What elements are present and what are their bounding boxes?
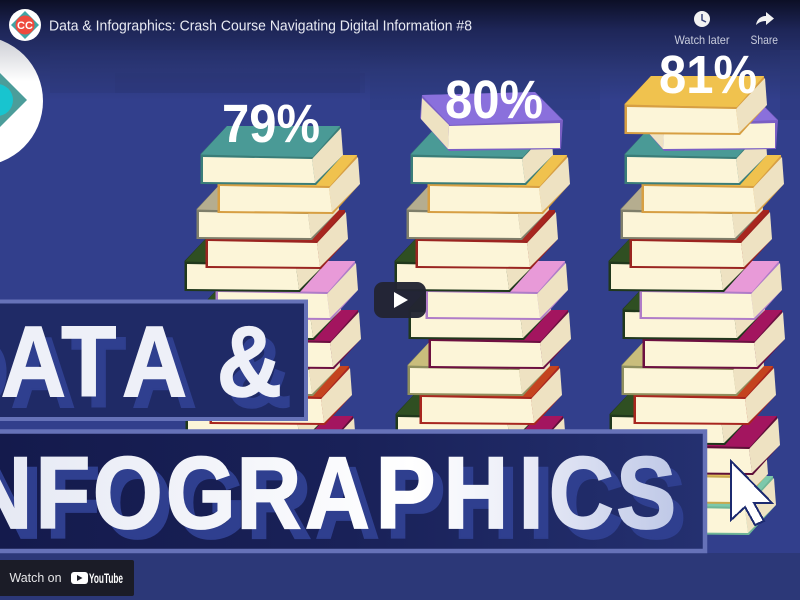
book: yellow top book: [624, 76, 767, 135]
share label: Share: [750, 33, 778, 47]
video title: Data & Infographics: Crash Course Navigating Digital Information #8: [49, 18, 472, 34]
percentage label: 80%: 80%: [445, 70, 543, 130]
watch later label: Watch later: [674, 33, 730, 47]
book stack column: 79%: [184, 94, 361, 535]
share control: [750, 12, 778, 47]
book stack column: 81%: [608, 45, 785, 535]
percentage label: 79%: 79%: [222, 94, 320, 154]
watch on youtube badge: [0, 560, 134, 596]
watch on youtube badge: YouTube: [89, 570, 123, 586]
icon: mouse cursor: [731, 461, 772, 525]
book: purple top book: [420, 92, 563, 151]
percentage label: 81%: 81%: [659, 45, 757, 105]
channel logo: [9, 9, 41, 41]
play button: [374, 282, 426, 318]
brand circle logo at left edge: [0, 36, 43, 166]
book stack column: 80%: [394, 70, 571, 535]
watch on youtube badge: Watch on: [10, 570, 62, 585]
channel logo: CC: [17, 20, 33, 32]
book: purple second book: [635, 92, 778, 151]
watch later control: [674, 11, 730, 47]
